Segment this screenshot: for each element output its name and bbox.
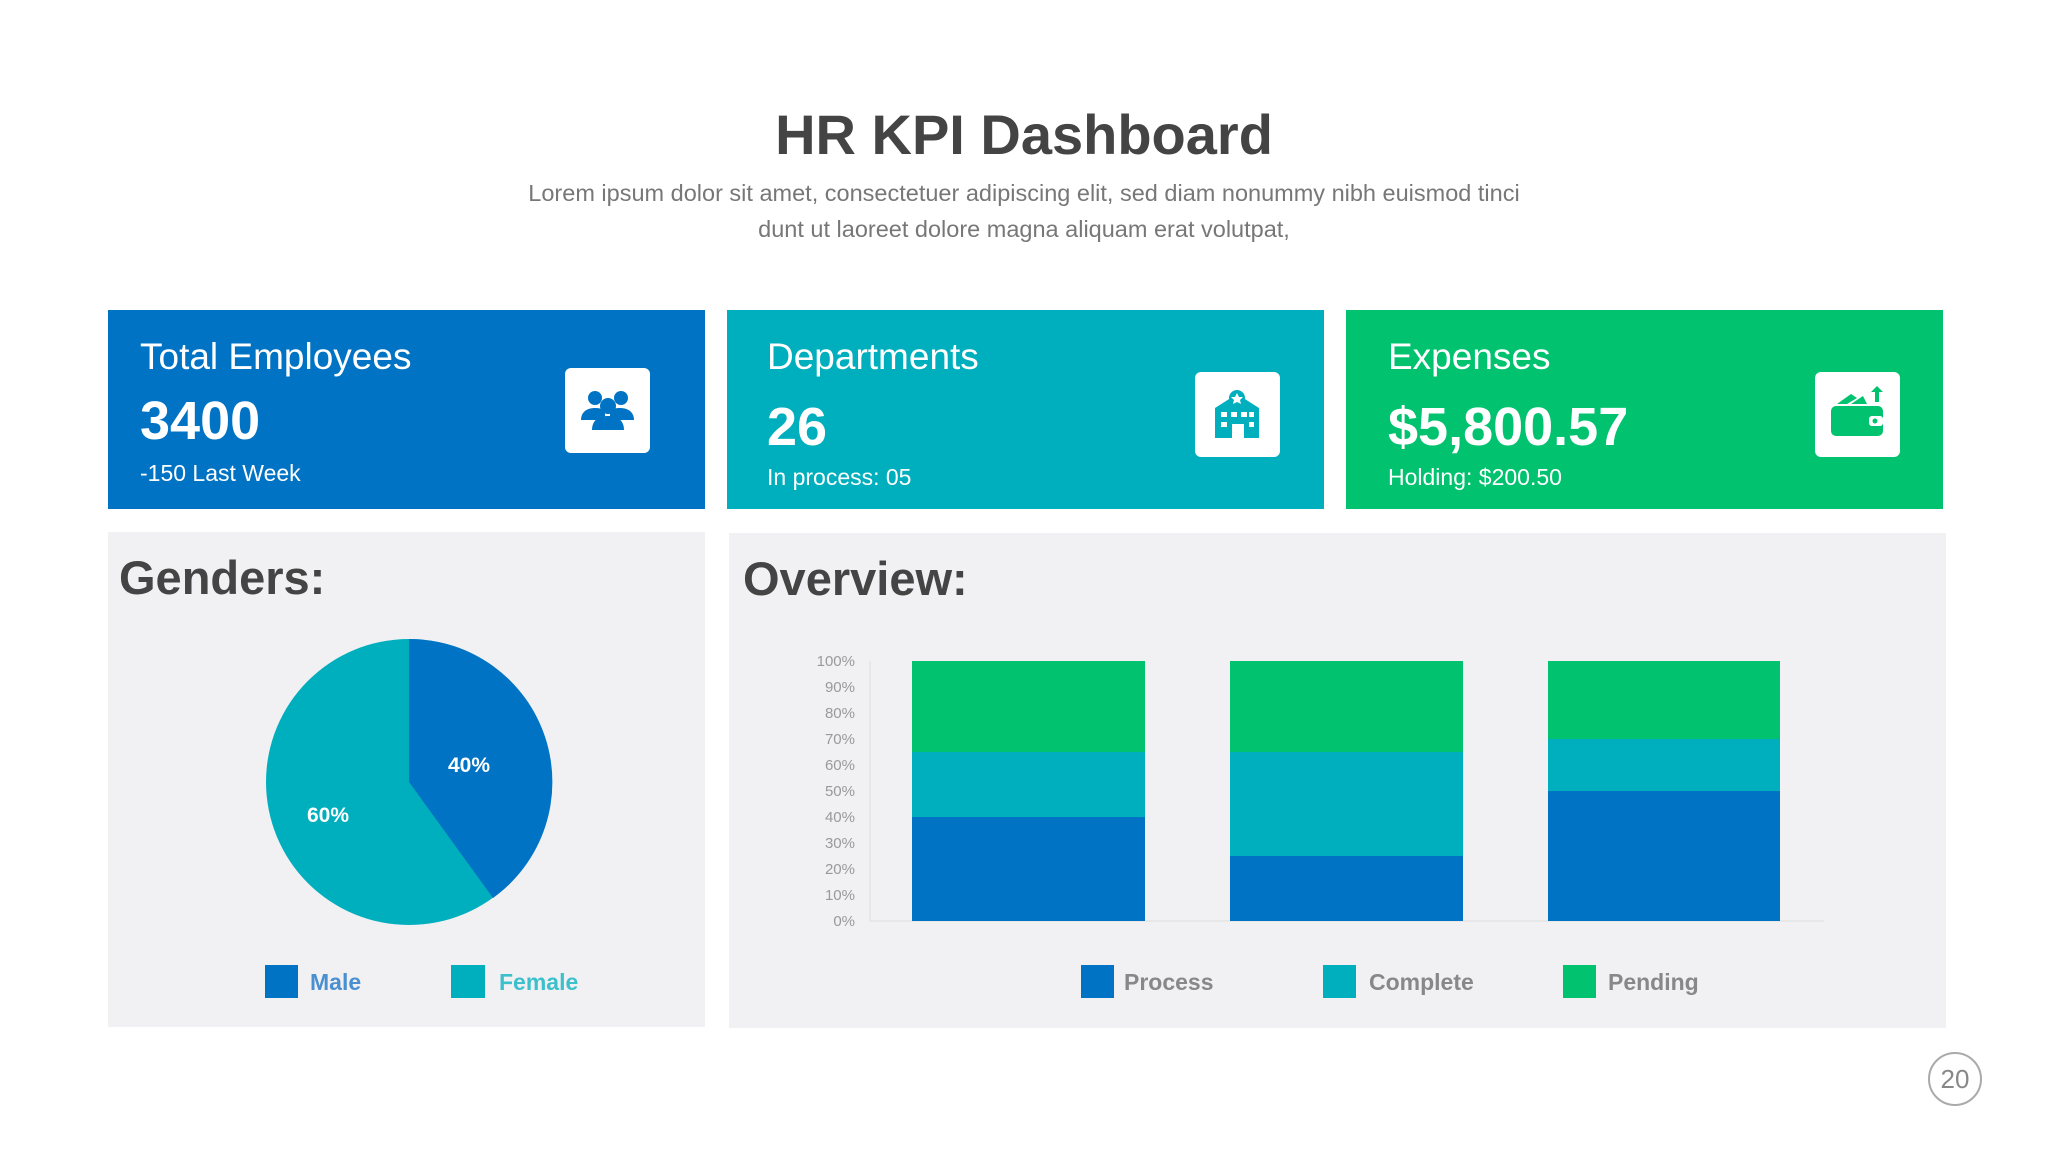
page number: 20: [1941, 1064, 1969, 1094]
card: total employees: Total Employees: [140, 336, 411, 377]
card: departments: [727, 310, 1324, 509]
icon: people: [565, 368, 650, 453]
card: departments: 26: [767, 397, 827, 457]
heading: genders: Genders:: [119, 551, 325, 604]
title: HR KPI Dashboard: [775, 103, 1273, 166]
subtitle: [528, 180, 1520, 242]
stacked bar chart: 40%: [825, 809, 855, 826]
page number: [1928, 1052, 1982, 1106]
card: departments: Departments: [767, 336, 979, 377]
stacked bar chart: 80%: [825, 705, 855, 722]
stacked bar chart: 20%: [825, 861, 855, 878]
card: expenses: Holding: $200.50: [1388, 464, 1562, 490]
stacked bar chart: 10%: [825, 887, 855, 904]
stacked bar chart: 60%: [825, 757, 855, 774]
card: total employees: -150 Last Week: [140, 460, 301, 486]
stacked bar chart: 0%: [833, 913, 855, 930]
legend: genders: [265, 965, 578, 998]
stacked bar chart: 100%: [817, 653, 855, 670]
subtitle: Lorem ipsum dolor sit amet, consectetuer adipiscing elit, sed diam nonummy nibh euismod tinci: [528, 180, 1520, 206]
icon: building: [1195, 372, 1280, 457]
stacked bar chart: 90%: [825, 679, 855, 696]
card: expenses: [1346, 310, 1943, 509]
legend: genders: Male: [310, 969, 361, 995]
card: total employees: 3400: [140, 391, 260, 451]
card: departments: In process: 05: [767, 464, 911, 490]
panel: overview: Pending: [1608, 969, 1699, 995]
card: expenses: $5,800.57: [1388, 397, 1628, 457]
card: expenses: Expenses: [1388, 336, 1550, 377]
stacked bar chart: 70%: [825, 731, 855, 748]
panel: overview: [729, 533, 1946, 1028]
legend: overview: Complete: [1369, 969, 1474, 995]
pie chart: 60%: [307, 804, 349, 827]
stacked bar chart: 30%: [825, 835, 855, 852]
legend: overview: [1081, 965, 1699, 998]
pie chart: [266, 639, 552, 925]
legend: genders: Female: [499, 969, 578, 995]
stacked bar chart: 50%: [825, 783, 855, 800]
stacked bar chart: [817, 653, 1824, 930]
subtitle: dunt ut laoreet dolore magna aliquam erat volutpat,: [758, 216, 1290, 242]
card: total employees: [108, 310, 705, 509]
legend: overview: Process: [1124, 969, 1214, 995]
pie chart: 40%: [448, 754, 490, 777]
icon: wallet: [1815, 372, 1900, 457]
heading: overview: Overview:: [743, 552, 968, 605]
panel: genders: [108, 532, 705, 1027]
